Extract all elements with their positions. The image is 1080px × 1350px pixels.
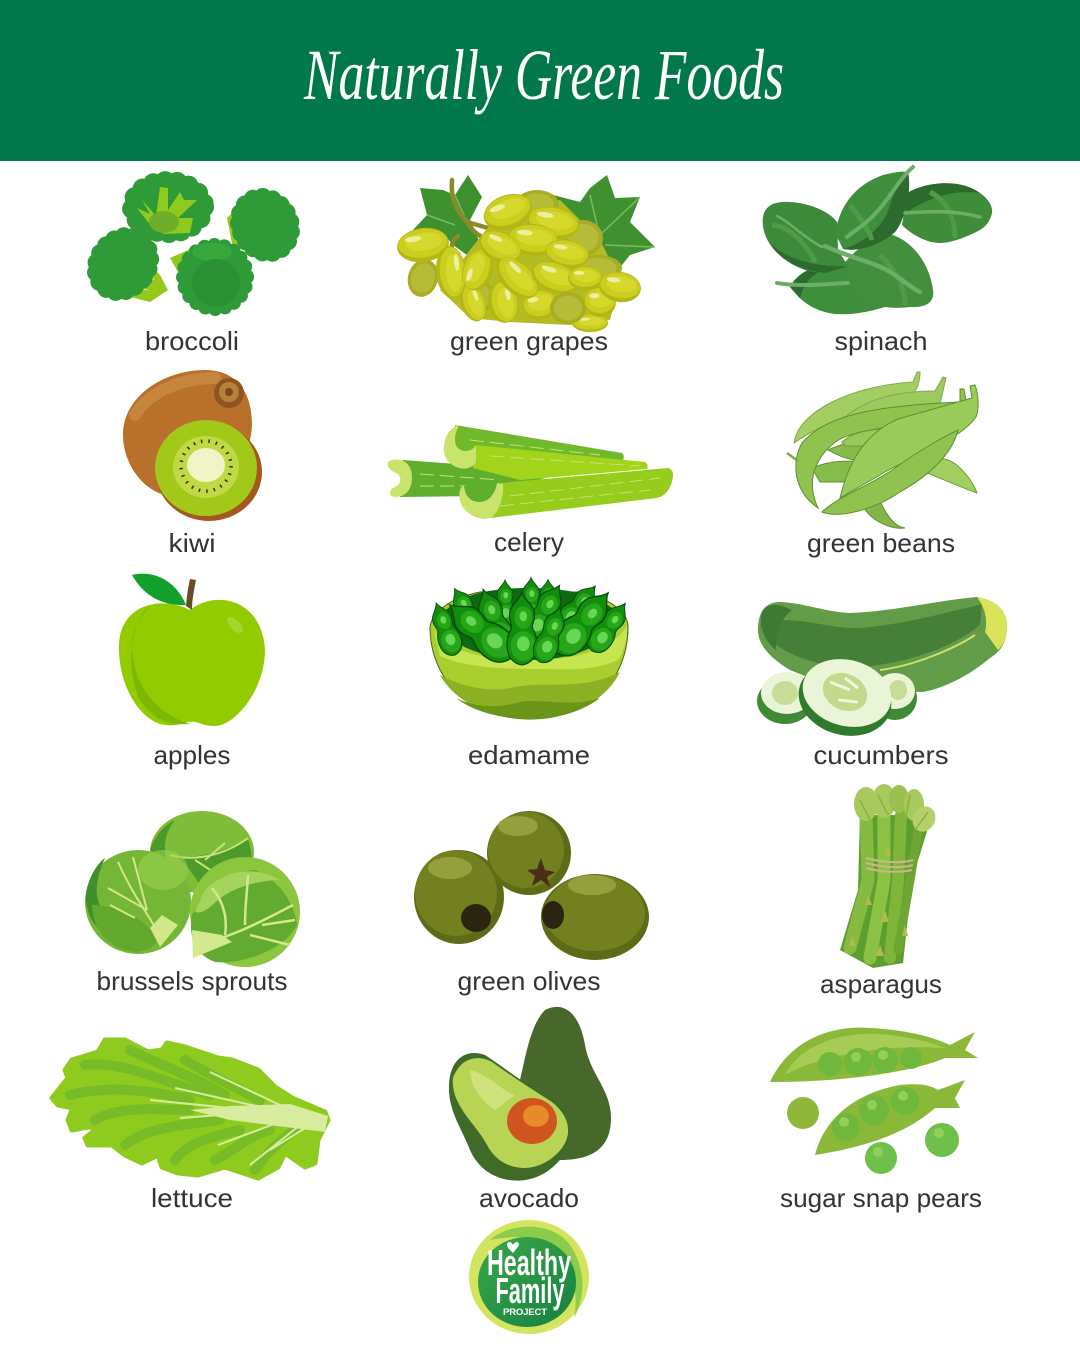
- icon: green beans: [787, 372, 978, 528]
- label: cucumbers: cucumbers: [814, 740, 948, 770]
- label: avocado: avocado: [479, 1183, 579, 1213]
- label: broccoli: broccoli: [145, 326, 239, 356]
- label: sugar snap pears: sugar snap pears: [780, 1183, 982, 1213]
- label: green grapes: green grapes: [450, 326, 608, 356]
- logo: Healthy Family Project: [469, 1220, 589, 1334]
- header banner: [0, 0, 1080, 161]
- icon: apples: [119, 574, 265, 726]
- icon: green olives: [414, 811, 649, 960]
- icon: cucumbers: [757, 597, 1007, 746]
- icon: broccoli: [85, 181, 301, 309]
- label: edamame: edamame: [468, 740, 590, 770]
- label: kiwi: kiwi: [168, 528, 216, 558]
- icon: lettuce: [52, 1040, 328, 1178]
- label: asparagus: asparagus: [820, 969, 942, 999]
- icon: kiwi: [123, 370, 262, 521]
- icon: celery: [388, 425, 673, 519]
- label: spinach: spinach: [834, 326, 928, 356]
- icon: asparagus: [840, 784, 939, 968]
- label: apples: apples: [154, 740, 230, 770]
- label: celery: celery: [494, 527, 564, 557]
- label: lettuce: lettuce: [151, 1183, 233, 1213]
- icon: brussels sprouts: [85, 811, 300, 967]
- icon: green grapes: [395, 175, 655, 332]
- icon: spinach: [763, 167, 992, 314]
- icon: edamame bowl: [426, 578, 635, 719]
- icon: sugar snap peas: [770, 1028, 978, 1174]
- icon: avocado: [449, 1007, 611, 1181]
- title: Naturally Green Foods: [303, 35, 784, 115]
- logo: Healthy Family Project: Family: [496, 1270, 564, 1311]
- label: brussels sprouts: brussels sprouts: [96, 966, 288, 996]
- logo: Healthy Family Project: Healthy: [487, 1242, 571, 1283]
- label: green beans: green beans: [807, 528, 955, 558]
- logo: Healthy Family Project: PROJECT: [503, 1307, 547, 1318]
- label: green olives: green olives: [458, 966, 600, 996]
